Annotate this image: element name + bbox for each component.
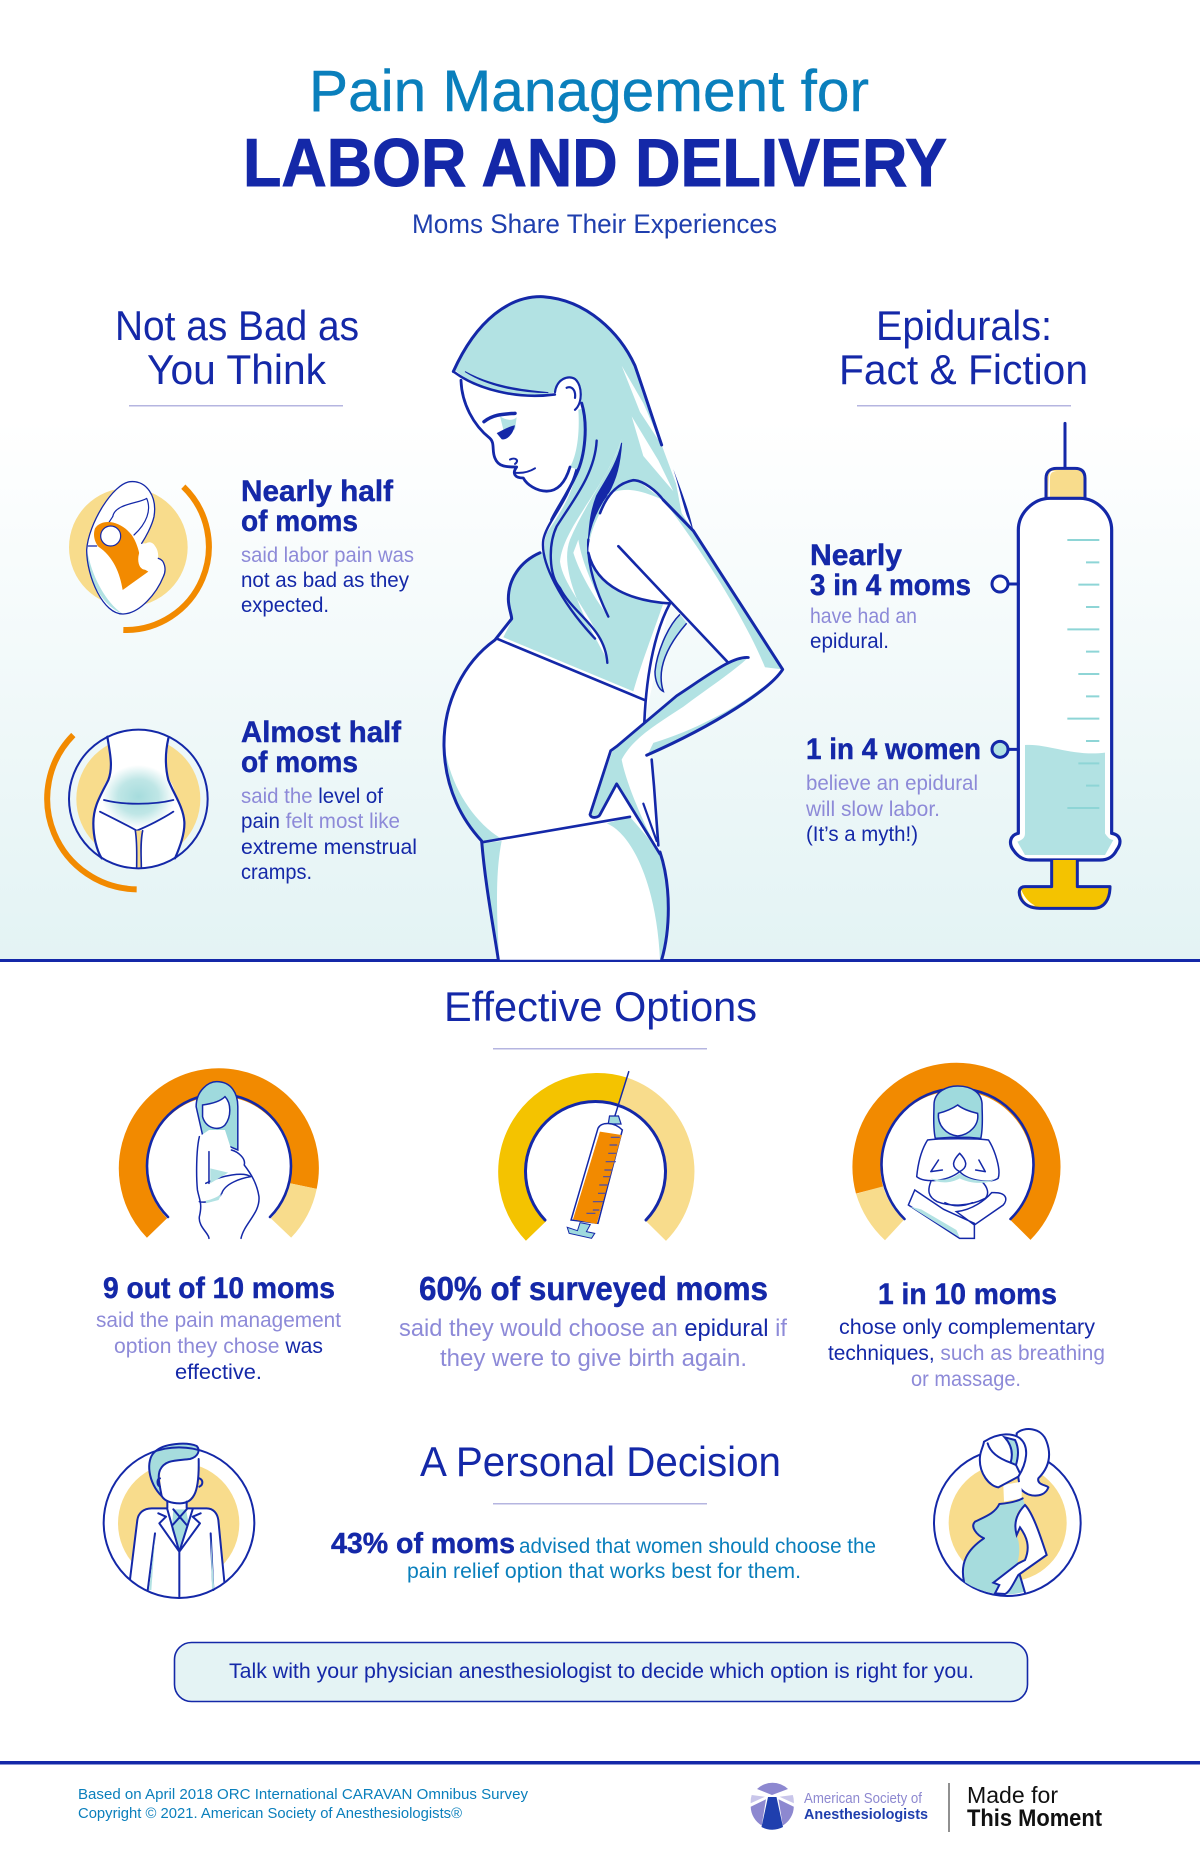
chart: syringe [992,423,1120,908]
panel: epidurals fact and fiction [805,302,1120,908]
heading: epidurals: Fact & Fiction [839,346,1088,393]
text: 1 in 4 women: believe an epidural [806,772,978,795]
marker: 1 in 4 [992,741,1018,757]
text: 60 percent of surveyed moms: they were to give birth again. [440,1345,747,1372]
text: 60 percent of surveyed moms: 60% of surveyed moms [419,1270,768,1307]
text: 9 out of 10 moms: option they chose was [114,1335,323,1358]
title: Pain Management for [309,59,869,124]
text: nearly 3 in 4 moms: Nearly [810,539,902,572]
text: almost half of moms: Almost half [241,716,402,749]
text: nearly 3 in 4 moms: 3 in 4 moms [810,569,971,602]
text: 1 in 4 women: (It’s a myth!) [806,823,918,846]
illustration: pregnant woman [444,297,783,960]
heading: effective options: Effective Options [444,983,757,1030]
text: 60 percent of surveyed moms [399,1270,787,1372]
text: 1 in 10 moms: 1 in 10 moms [878,1278,1057,1311]
footer: source note [78,1787,529,1822]
gauge: 60 percent [512,1072,680,1238]
panel: not as bad as you think [47,302,417,889]
text: nearly half of moms: said labor pain was [241,544,414,567]
gauge: 1 in 10 [866,1077,1046,1238]
text: a personal decision: 43% of moms [331,1528,515,1560]
figure: meditating woman [908,1086,1006,1238]
text: nearly 3 in 4 moms: have had an [810,605,917,628]
logo: made for this moment [967,1782,1102,1832]
text: 1 in 10 moms: techniques, such as breathing [828,1342,1105,1365]
heading: epidurals [839,302,1088,406]
text: a personal decision: pain relief option that works best for them. [407,1559,801,1583]
icon: abdomen cramps [47,730,208,889]
heading: not as bad: You Think [147,346,327,393]
text: almost half of moms [241,716,417,884]
figure: standing pregnant woman [196,1082,259,1238]
hair [455,297,693,663]
text: almost half of moms: extreme menstrual [241,836,417,859]
text: nearly half of moms: expected. [241,594,329,617]
text: 9 out of 10 moms: effective. [175,1361,262,1384]
text: a personal decision: advised that women should choose the [519,1534,876,1558]
text: a personal decision: A Personal Decision [420,1438,781,1485]
logo: american society of anesthesiologists [751,1783,928,1830]
footer: source note: Based on April 2018 ORC International CARAVAN Omnibus Survey [78,1787,529,1803]
text: 9 out of 10 moms: said the pain management [96,1309,341,1332]
heading: not as bad [115,302,359,406]
text: 1 in 10 moms: chose only complementary [839,1316,1096,1339]
text: 1 in 4 women [805,733,981,846]
text: nearly half of moms [241,475,414,617]
text: nearly half of moms: Nearly half [241,475,394,508]
callout: talk with your physician [174,1642,1028,1702]
heading: epidurals: Epidurals: [876,302,1052,349]
arm and shoulder [588,480,783,854]
footer: source note: Copyright © 2021. American Society of Anesthesiologists® [78,1806,462,1822]
text: a personal decision [331,1438,876,1583]
title: LABOR AND DELIVERY [243,125,947,201]
text: nearly half of moms: not as bad as they [241,569,409,592]
text: nearly 3 in 4 moms [810,539,971,653]
text: 60 percent of surveyed moms: said they would choose an epidural if [399,1315,787,1342]
text: 9 out of 10 moms [96,1272,341,1384]
gauge: 9 out of 10 [133,1082,305,1238]
text: nearly half of moms: of moms [241,505,358,538]
callout: talk with your physician: Talk with your physician anesthesiologist to decide which option is right for you. [229,1660,974,1683]
logo: made for this moment: This Moment [967,1805,1102,1832]
heading: not as bad: Not as Bad as [115,302,359,349]
title [243,59,947,239]
icon: mother and baby [69,482,209,630]
text: almost half of moms: pain felt most like [241,810,400,833]
title: Moms Share Their Experiences [412,209,777,239]
text: 1 in 4 women: will slow labor. [805,798,940,821]
text: 1 in 10 moms [828,1278,1105,1391]
logo: american society of anesthesiologists: Anesthesiologists [804,1806,928,1823]
logo: american society of anesthesiologists: American Society of [804,1791,923,1807]
icon: doctor [104,1444,254,1598]
text: 1 in 10 moms: or massage. [911,1368,1021,1391]
text: 9 out of 10 moms: 9 out of 10 moms [103,1272,335,1305]
text: almost half of moms: of moms [241,746,358,779]
text: nearly 3 in 4 moms: epidural. [810,630,889,653]
outlines [600,480,663,513]
face [461,380,583,491]
logo: made for this moment: Made for [967,1782,1058,1808]
figure: syringe [567,1072,629,1238]
icon: pregnant woman portrait [934,1429,1081,1596]
text: almost half of moms: said the level of [241,785,383,808]
text: almost half of moms: cramps. [241,861,312,884]
body [444,553,670,960]
marker: 3 in 4 [992,576,1018,592]
text: 1 in 4 women: 1 in 4 women [806,733,981,766]
